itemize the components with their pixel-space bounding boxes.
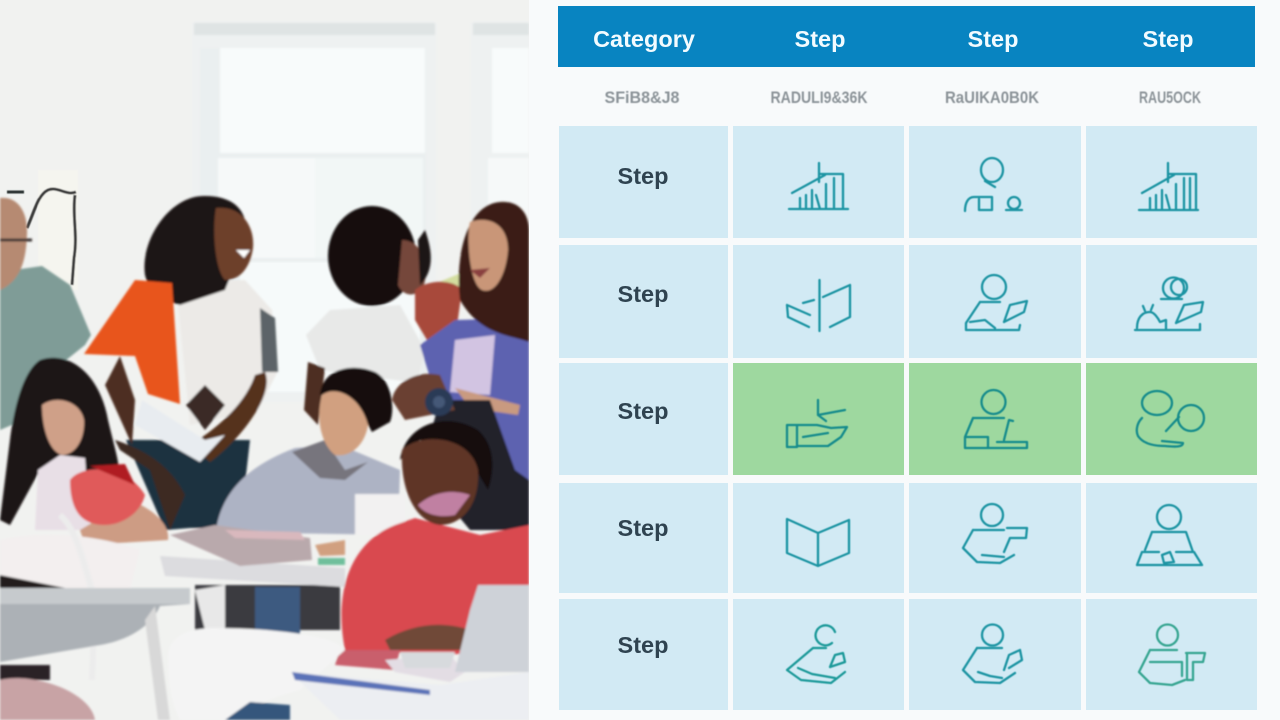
- row 1: [559, 126, 1257, 238]
- boy in striped shirt: [216, 368, 400, 535]
- woman in blue denim: [413, 200, 529, 481]
- icon: person with quill: [966, 275, 1027, 330]
- header: Step 3: Step: [1143, 26, 1193, 52]
- sub-header labels: RaUIKA0B0K: [945, 88, 1040, 107]
- icon: person at desk: [965, 390, 1027, 448]
- icon: person with phone: [787, 625, 845, 683]
- icon: person with circle: [1137, 391, 1204, 447]
- row 5: [559, 599, 1257, 710]
- sub-header labels: [604, 88, 1202, 107]
- icon: person with mug: [963, 624, 1022, 683]
- row label: Step: [618, 398, 668, 424]
- row 4: [559, 483, 1257, 593]
- row label: Step: [618, 632, 668, 658]
- row label: Step: [618, 281, 668, 307]
- row 2: [559, 245, 1257, 358]
- row 3 highlighted: [559, 363, 1257, 475]
- row label: Step: [618, 515, 668, 541]
- sub-header labels: SFiB8&J8: [604, 88, 680, 107]
- table: [558, 6, 1257, 710]
- header: Step 2: Step: [968, 26, 1018, 52]
- icon: house chart: [789, 163, 848, 209]
- header row: [558, 6, 1255, 67]
- girl with pink pillow: [0, 356, 170, 590]
- classroom wall: [0, 0, 529, 720]
- panel background: [529, 0, 1280, 720]
- smiling woman in red sweater: [335, 374, 529, 670]
- white chair: [194, 626, 346, 720]
- icon: person reading at desk: [1137, 505, 1202, 565]
- header: Category: Category: [593, 26, 695, 52]
- icon: person with laptop: [1139, 624, 1205, 685]
- woman with afro hair: [304, 206, 431, 425]
- icon: person with plant and quill: [1135, 278, 1203, 330]
- header: Step 1: Step: [795, 26, 845, 52]
- people and furniture: [0, 196, 529, 720]
- photo: students in a classroom: [0, 0, 529, 720]
- woman with orange scarf: [84, 196, 278, 530]
- grey desk: [0, 588, 190, 720]
- icon: person with tablet: [963, 504, 1027, 563]
- centre desk and pink bag: [160, 494, 405, 636]
- sub-header labels: RAU5OCK: [1139, 88, 1202, 107]
- icon: open book with stem: [787, 280, 850, 331]
- laptop and front table: [225, 585, 529, 720]
- sub-header labels: RADULI9&36K: [770, 88, 868, 107]
- icon: open book: [787, 519, 849, 566]
- icon: hand holding arrow: [787, 400, 847, 447]
- man with sweater: [0, 198, 91, 430]
- icon: person with child: [965, 158, 1022, 211]
- row label: Step: [618, 163, 668, 189]
- right window: [472, 23, 529, 216]
- icon: house chart: [1139, 163, 1198, 210]
- left window: [192, 22, 436, 402]
- wall lamp and vine: [6, 186, 78, 286]
